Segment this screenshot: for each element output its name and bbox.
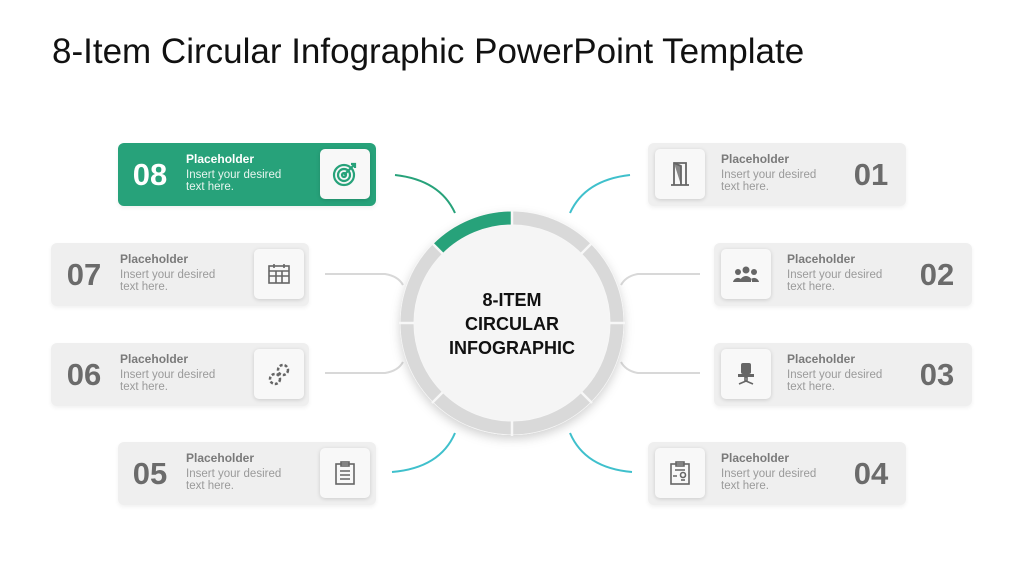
connector 05 — [392, 433, 455, 472]
title: 8-Item Circular Infographic PowerPoint Template — [52, 32, 804, 71]
central circle: CIRCULAR — [465, 314, 559, 334]
card 07: 07 — [67, 257, 101, 292]
central circle: INFOGRAPHIC — [449, 338, 575, 358]
card 01: 01 — [854, 157, 888, 192]
card 06: Insert your desired — [120, 369, 215, 381]
icon: clipboard — [320, 448, 370, 498]
connector 08 — [395, 175, 455, 213]
card 02: Placeholder — [787, 252, 855, 266]
card 04: Insert your desired — [721, 468, 816, 480]
card 03: Placeholder — [787, 352, 855, 366]
card 07: Insert your desired — [120, 269, 215, 281]
card 04 — [648, 442, 906, 505]
icon: chair — [721, 349, 771, 399]
card 03 — [714, 343, 972, 406]
card 01: Placeholder — [721, 152, 789, 166]
card 04: text here. — [721, 480, 769, 492]
card 06: 06 — [67, 357, 101, 392]
card 05: Placeholder — [186, 451, 254, 465]
card 07: Placeholder — [120, 252, 188, 266]
card 01 — [648, 143, 906, 206]
card 05: Insert your desired — [186, 468, 281, 480]
card 07: text here. — [120, 281, 168, 293]
connector 06 — [325, 362, 403, 373]
card 03: text here. — [787, 381, 835, 393]
icon: gears — [254, 349, 304, 399]
card 02: Insert your desired — [787, 269, 882, 281]
card 08 — [118, 143, 376, 206]
connector 03 — [621, 362, 700, 373]
connector 02 — [621, 274, 700, 285]
card 05: text here. — [186, 480, 234, 492]
icon: target — [320, 149, 370, 199]
card 06: Placeholder — [120, 352, 188, 366]
card 02: text here. — [787, 281, 835, 293]
card 06 — [51, 343, 309, 406]
connector 07 — [325, 274, 403, 285]
card 08: text here. — [186, 181, 234, 193]
card 03: 03 — [920, 357, 954, 392]
card 02 — [714, 243, 972, 306]
icon: people — [721, 249, 771, 299]
card 02: 02 — [920, 257, 954, 292]
icon: certificate clipboard — [655, 448, 705, 498]
card 07 — [51, 243, 309, 306]
card 08: Placeholder — [186, 152, 254, 166]
connector 04 — [570, 433, 632, 472]
card 08: 08 — [133, 157, 167, 192]
card 06: text here. — [120, 381, 168, 393]
card 04: Placeholder — [721, 451, 789, 465]
card 03: Insert your desired — [787, 369, 882, 381]
card 05: 05 — [133, 456, 167, 491]
central circle — [399, 210, 625, 436]
icon: calendar — [254, 249, 304, 299]
card 01: Insert your desired — [721, 169, 816, 181]
card 08: Insert your desired — [186, 169, 281, 181]
center text: 8-ITEM — [482, 290, 542, 310]
connector 01 — [570, 175, 630, 213]
card 05 — [118, 442, 376, 505]
card 04: 04 — [854, 456, 888, 491]
icon: door — [655, 149, 705, 199]
card 01: text here. — [721, 181, 769, 193]
